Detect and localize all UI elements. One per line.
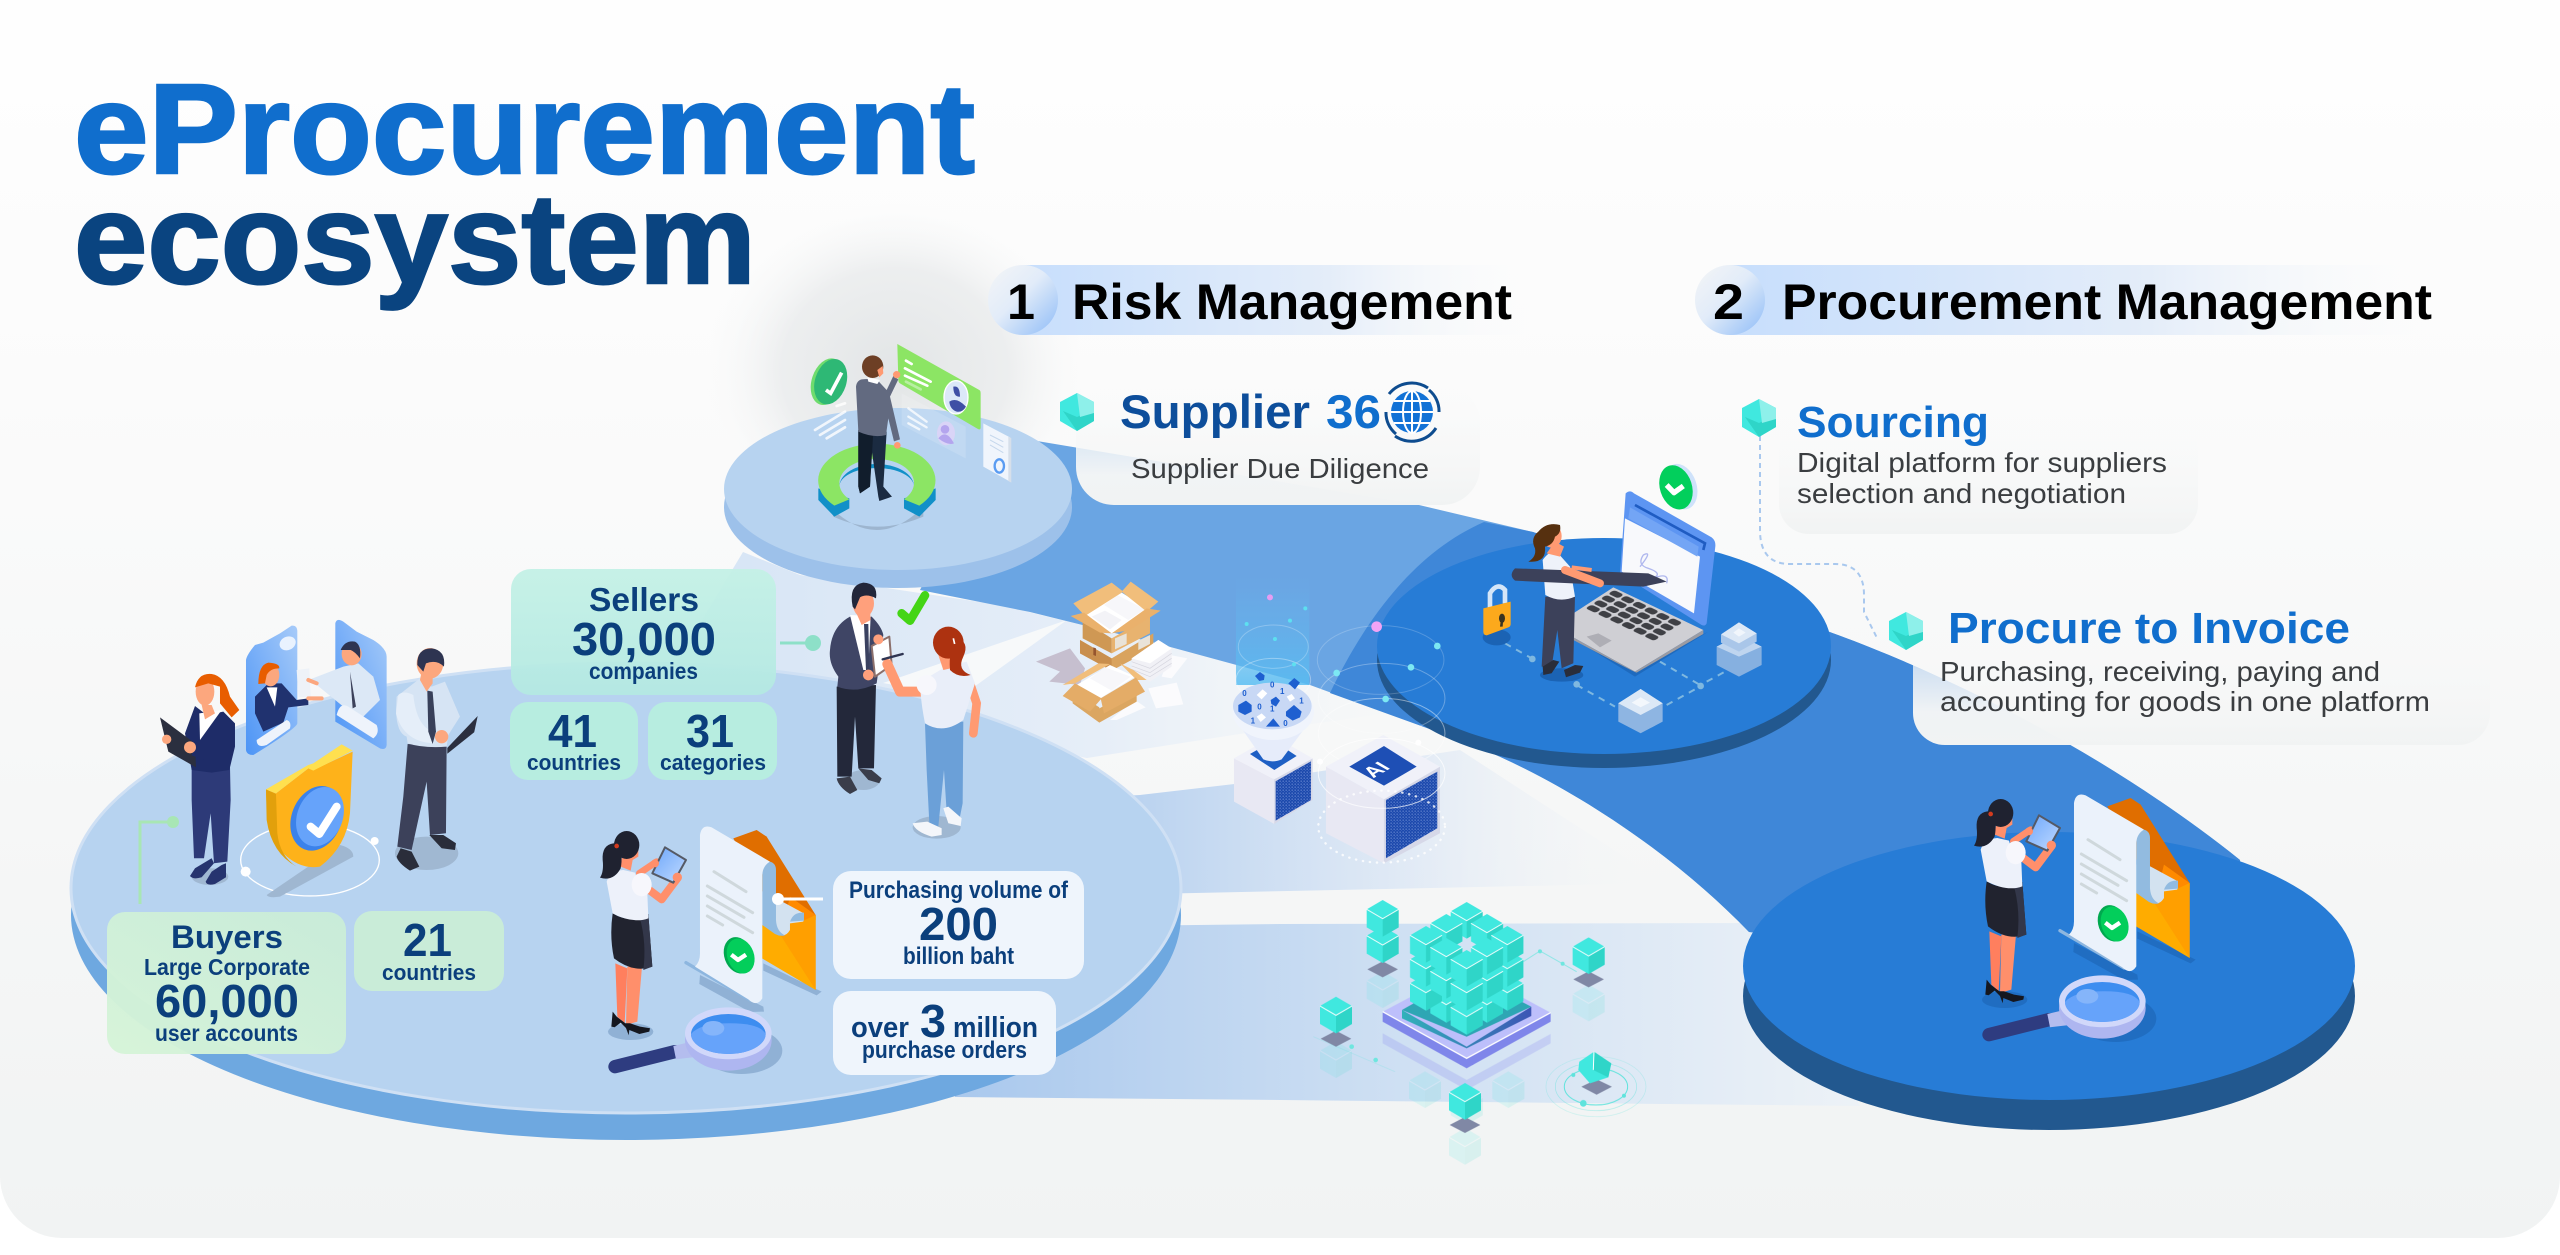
description: Purchasing, receiving, paying and: [1940, 656, 2380, 687]
label: procure to invoice: Procure to Invoice: [1948, 604, 2350, 653]
illustration: risk manager: [805, 344, 1011, 530]
person: seller woman: [883, 627, 977, 839]
card: 31 categories: categories: [660, 750, 766, 775]
card: purchase orders: over: [851, 1012, 909, 1044]
cube stack: [1410, 902, 1523, 1035]
label: supplier 360: 36: [1326, 385, 1381, 438]
data dots: [1245, 594, 1441, 765]
card: 21 countries: [354, 911, 504, 991]
description: [1940, 656, 2430, 717]
rotating cube with rings: [1546, 1052, 1646, 1117]
icon: check badge: [1654, 460, 1703, 514]
card: buyers: [107, 912, 346, 1054]
card: purchase orders: million: [953, 1012, 1038, 1044]
card: buyers: 60,000: [155, 975, 299, 1027]
funnel: 0: [1257, 702, 1262, 711]
connector: buyers: [140, 816, 179, 904]
illustration: document woman procure side: [1974, 795, 2196, 1042]
card: 41 countries: [510, 702, 638, 780]
flow: purchasing to invoice: [950, 923, 1860, 1106]
heading: 1 risk management: Risk Management: [1072, 274, 1512, 330]
connector lines: [1313, 951, 1577, 1072]
description: [1797, 447, 2167, 509]
AI cube: AI: [1358, 759, 1395, 781]
floating cubes: [1320, 900, 1605, 1120]
platform: buyers and sellers disc: [71, 663, 1181, 1140]
icon: block stacks: [1618, 622, 1762, 733]
illustration: signing on laptop: [1483, 460, 1762, 733]
ghost reflections: [1320, 971, 1605, 1165]
card: buyers: Buyers: [171, 919, 283, 955]
card: purchasing volume: 200: [919, 898, 998, 950]
AI cube: [1318, 735, 1445, 863]
dashed connector: sourcing to procure: [1760, 436, 1878, 640]
connector: sellers: [780, 635, 821, 651]
laptop: [1573, 491, 1715, 677]
illustration: buyers group: [160, 620, 476, 897]
connector nodes: [1349, 949, 1565, 1062]
funnel: 1: [1251, 716, 1256, 725]
heading: 2 procurement management: [1695, 265, 2432, 335]
card: 31 categories: 31: [686, 705, 734, 757]
description: Supplier Due Diligence: [1131, 453, 1429, 484]
card: sellers: [511, 569, 776, 695]
card: purchasing volume: [833, 871, 1084, 979]
funnel: 0: [1242, 689, 1247, 698]
blue flow band: [920, 432, 2250, 980]
card: 21 countries: 21: [403, 914, 452, 966]
title: eProcurement: [74, 58, 975, 201]
card: supplier 360: [1060, 383, 1480, 505]
person: signing woman: [1512, 524, 1667, 682]
label: supplier 360: Supplier: [1120, 385, 1310, 438]
card: purchase orders: [833, 991, 1056, 1075]
flow: white wedge: [883, 620, 1067, 697]
illustration: seller and buyer handshake: [830, 583, 977, 839]
person: seller man: [830, 583, 892, 794]
illustration: data blocks: [1313, 900, 1646, 1165]
platform: risk disc: [724, 408, 1072, 588]
card: 21 countries: countries: [382, 960, 476, 985]
description: selection and negotiation: [1797, 478, 2126, 509]
icon: cube: [1889, 612, 1923, 650]
card: sourcing: [1742, 398, 2198, 534]
funnel: 1: [1280, 687, 1285, 696]
card: purchasing volume: billion baht: [903, 943, 1014, 970]
funnel: 1: [1299, 696, 1304, 705]
shadow tiles: [1321, 961, 1612, 1133]
label: sourcing: Sourcing: [1797, 398, 1989, 447]
card: purchasing volume: Purchasing volume of: [849, 877, 1069, 904]
illustration: data funnel and AI cube: [1233, 570, 1445, 863]
card: purchase orders: 3: [920, 995, 946, 1047]
title: [74, 58, 975, 311]
funnel: 0: [1283, 719, 1288, 728]
heading: 2 procurement management: Procurement Management: [1782, 274, 2432, 330]
card: sellers: companies: [589, 658, 698, 684]
card: 41 countries: countries: [527, 750, 621, 775]
icon: cube: [1060, 393, 1094, 431]
illustration: cardboard boxes: [1036, 582, 1187, 723]
funnel: 1: [1270, 705, 1275, 714]
heading: 1 risk management: 1: [1007, 274, 1035, 330]
heading: 2 procurement management: 2: [1713, 274, 1744, 330]
funnel: 0: [1270, 680, 1275, 689]
funnel base: [1234, 736, 1313, 824]
flow: sellers to risk and sourcing: [660, 552, 1460, 758]
card: 31 categories: [648, 702, 777, 780]
icon: rotating globe: [1386, 383, 1439, 441]
person: buyer man: [395, 648, 476, 871]
description: Digital platform for suppliers: [1797, 447, 2167, 478]
dashed links and nodes: [1505, 643, 1725, 707]
connector: purchasing: [772, 893, 823, 905]
platform: sourcing disc: [1377, 538, 1831, 768]
title: ecosystem: [74, 168, 756, 311]
card: purchase orders: purchase orders: [862, 1037, 1027, 1064]
person: buyer woman: [160, 674, 239, 885]
flow: purchasing to sourcing: [1100, 750, 1660, 895]
light column: [1236, 570, 1309, 685]
card: procure to invoice: [1889, 604, 2490, 745]
heading: 1 risk management: [988, 265, 1533, 335]
icon: cube: [1742, 399, 1776, 437]
card: buyers: Large Corporate: [144, 954, 310, 980]
card: sellers: 30,000: [572, 613, 716, 665]
icon: video call phones: [246, 620, 387, 755]
description: accounting for goods in one platform: [1940, 686, 2430, 717]
orbit rings: [1236, 625, 1445, 768]
card: sellers: Sellers: [589, 581, 699, 618]
icon: shield: [241, 744, 379, 897]
base platform: [1383, 967, 1551, 1068]
nodes: [1529, 656, 1704, 689]
icon: green check: [902, 595, 925, 621]
icon: padlock: [1483, 587, 1511, 645]
platform: procure to invoice disc: [1743, 832, 2355, 1130]
funnel: [1233, 672, 1314, 761]
illustration: document woman buyers side: [600, 827, 822, 1074]
card: buyers: user accounts: [155, 1020, 298, 1046]
card: 41 countries: 41: [548, 705, 597, 757]
